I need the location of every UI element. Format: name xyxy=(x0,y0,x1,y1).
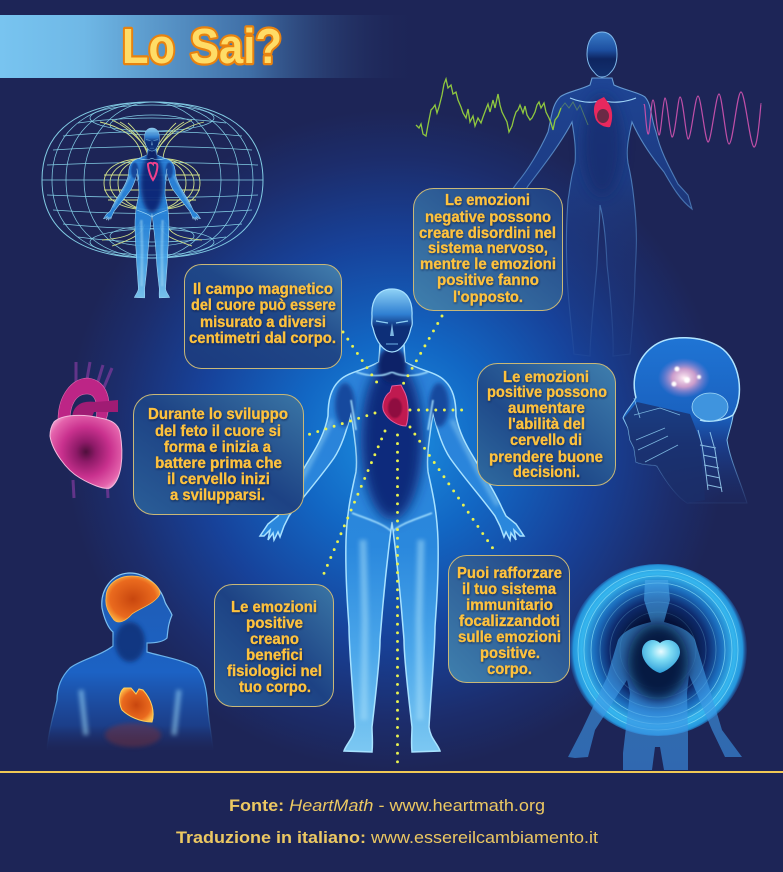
callout: fetal development: battere prima che xyxy=(155,455,282,472)
heart xyxy=(642,640,680,673)
toroidal magnetic field with figure xyxy=(42,102,263,298)
central heart xyxy=(383,385,408,426)
title: Sai? xyxy=(190,20,282,74)
spine xyxy=(698,430,722,492)
callout: negative emotions: positive fanno xyxy=(437,272,539,289)
callout: immune system: corpo. xyxy=(487,661,532,678)
title: Lo xyxy=(122,20,175,74)
callout: magnetic field: del cuore può essere xyxy=(191,297,336,314)
central figure xyxy=(260,289,524,752)
arm highlights xyxy=(81,690,179,735)
background glow behind central figure xyxy=(0,100,783,771)
callout: decision making: decisioni. xyxy=(513,464,580,481)
callout: physiological benefits: creano xyxy=(250,631,299,648)
cerebellum xyxy=(692,393,728,421)
callout: fetal development: a svilupparsi. xyxy=(170,487,265,504)
thin ring strokes xyxy=(578,570,738,730)
callout: immune system: immunitario xyxy=(466,597,553,614)
callout: physiological benefits: fisiologici nel xyxy=(227,663,322,680)
skull and brain profile xyxy=(623,338,747,503)
jaw and teeth xyxy=(634,398,680,462)
title xyxy=(122,20,282,74)
callout: physiological benefits xyxy=(214,584,334,706)
torso shadow xyxy=(582,95,622,195)
orange heart xyxy=(120,688,153,722)
coherent sine wave xyxy=(644,92,761,147)
rings xyxy=(569,564,747,736)
lower face darkening xyxy=(624,402,705,503)
callout: negative emotions: Le emozioni xyxy=(445,192,530,209)
callout: magnetic field: misurato a diversi xyxy=(200,314,326,331)
brain sparkle points xyxy=(672,366,701,386)
callout: negative emotions: sistema nervoso, xyxy=(428,240,548,257)
callout: negative emotions: l'opposto. xyxy=(453,289,523,306)
callout: decision making: positive possono xyxy=(487,384,607,401)
brain glow xyxy=(658,358,710,398)
callout: physiological benefits: tuo corpo. xyxy=(239,679,311,696)
skull bright rim xyxy=(634,338,739,421)
heart body xyxy=(50,415,122,488)
footer xyxy=(0,771,783,872)
pulmonary trunk xyxy=(72,400,118,422)
anatomical heart, left xyxy=(50,362,122,498)
torso with orange brain and heart xyxy=(47,573,213,750)
callout: immune system: positive. xyxy=(480,645,540,662)
callout: fetal development: del feto il cuore si xyxy=(155,423,281,440)
head xyxy=(587,32,617,77)
lower red glow xyxy=(105,723,161,747)
callout: immune system: Puoi rafforzare xyxy=(457,565,562,582)
callout: decision making xyxy=(478,364,616,486)
callout: negative emotions: mentre le emozioni xyxy=(420,256,556,273)
head silhouette xyxy=(623,338,747,503)
callout: negative emotions: negative possono xyxy=(425,209,551,226)
heart xyxy=(594,97,612,127)
concentric energy rings with figure xyxy=(568,564,747,770)
callout: magnetic field: Il campo magnetico xyxy=(193,281,333,298)
dark chest xyxy=(628,624,688,700)
orange brain xyxy=(106,576,160,622)
callout: decision making: l'abilità del xyxy=(508,416,585,433)
callout: decision making: prendere buone xyxy=(489,449,603,466)
callout: physiological benefits: positive xyxy=(246,615,303,632)
inner yellow field lines xyxy=(100,120,204,246)
mini figure xyxy=(104,128,200,298)
mini heart xyxy=(148,163,157,180)
vessels xyxy=(73,362,112,498)
source line: Fonte: HeartMath - www.heartmath.org xyxy=(229,796,545,815)
translation line: Traduzione in italiano: www.essereilcambiamento.it xyxy=(176,828,598,847)
callout: fetal development xyxy=(134,394,304,514)
callout: physiological benefits: benefici xyxy=(246,647,303,664)
heart core xyxy=(597,109,609,123)
callout: immune system: focalizzandoti xyxy=(459,613,560,630)
aortic arch xyxy=(58,378,109,420)
callout: magnetic field xyxy=(184,264,342,368)
callout: decision making: Le emozioni xyxy=(503,369,589,386)
callout: immune system: sulle emozioni xyxy=(458,629,561,646)
chest lines xyxy=(570,98,636,102)
callout: fetal development: Durante lo sviluppo xyxy=(148,406,288,423)
callout: fetal development: il cervello inizi xyxy=(167,471,270,488)
top-right figure with heart rhythm xyxy=(416,32,761,356)
dotted connector lines xyxy=(304,316,494,767)
title banner xyxy=(0,15,418,78)
body xyxy=(512,78,692,356)
callout: fetal development: forma e inizia a xyxy=(164,439,271,456)
wireframe torus xyxy=(42,102,263,258)
callout: negative emotions xyxy=(414,188,562,310)
figure xyxy=(568,580,742,770)
callout: immune system xyxy=(448,556,570,682)
neck shadow xyxy=(115,622,145,662)
chaotic green wave xyxy=(416,79,561,136)
callout: negative emotions: creare disordini nel xyxy=(419,225,556,242)
callout: decision making: aumentare xyxy=(508,400,585,417)
callout: decision making: cervello di xyxy=(510,432,582,449)
callout: physiological benefits: Le emozioni xyxy=(231,599,317,616)
torso silhouette xyxy=(47,573,213,750)
callout: immune system: il tuo sistema xyxy=(462,581,556,598)
callout: magnetic field: centimetri dal corpo. xyxy=(189,330,336,347)
